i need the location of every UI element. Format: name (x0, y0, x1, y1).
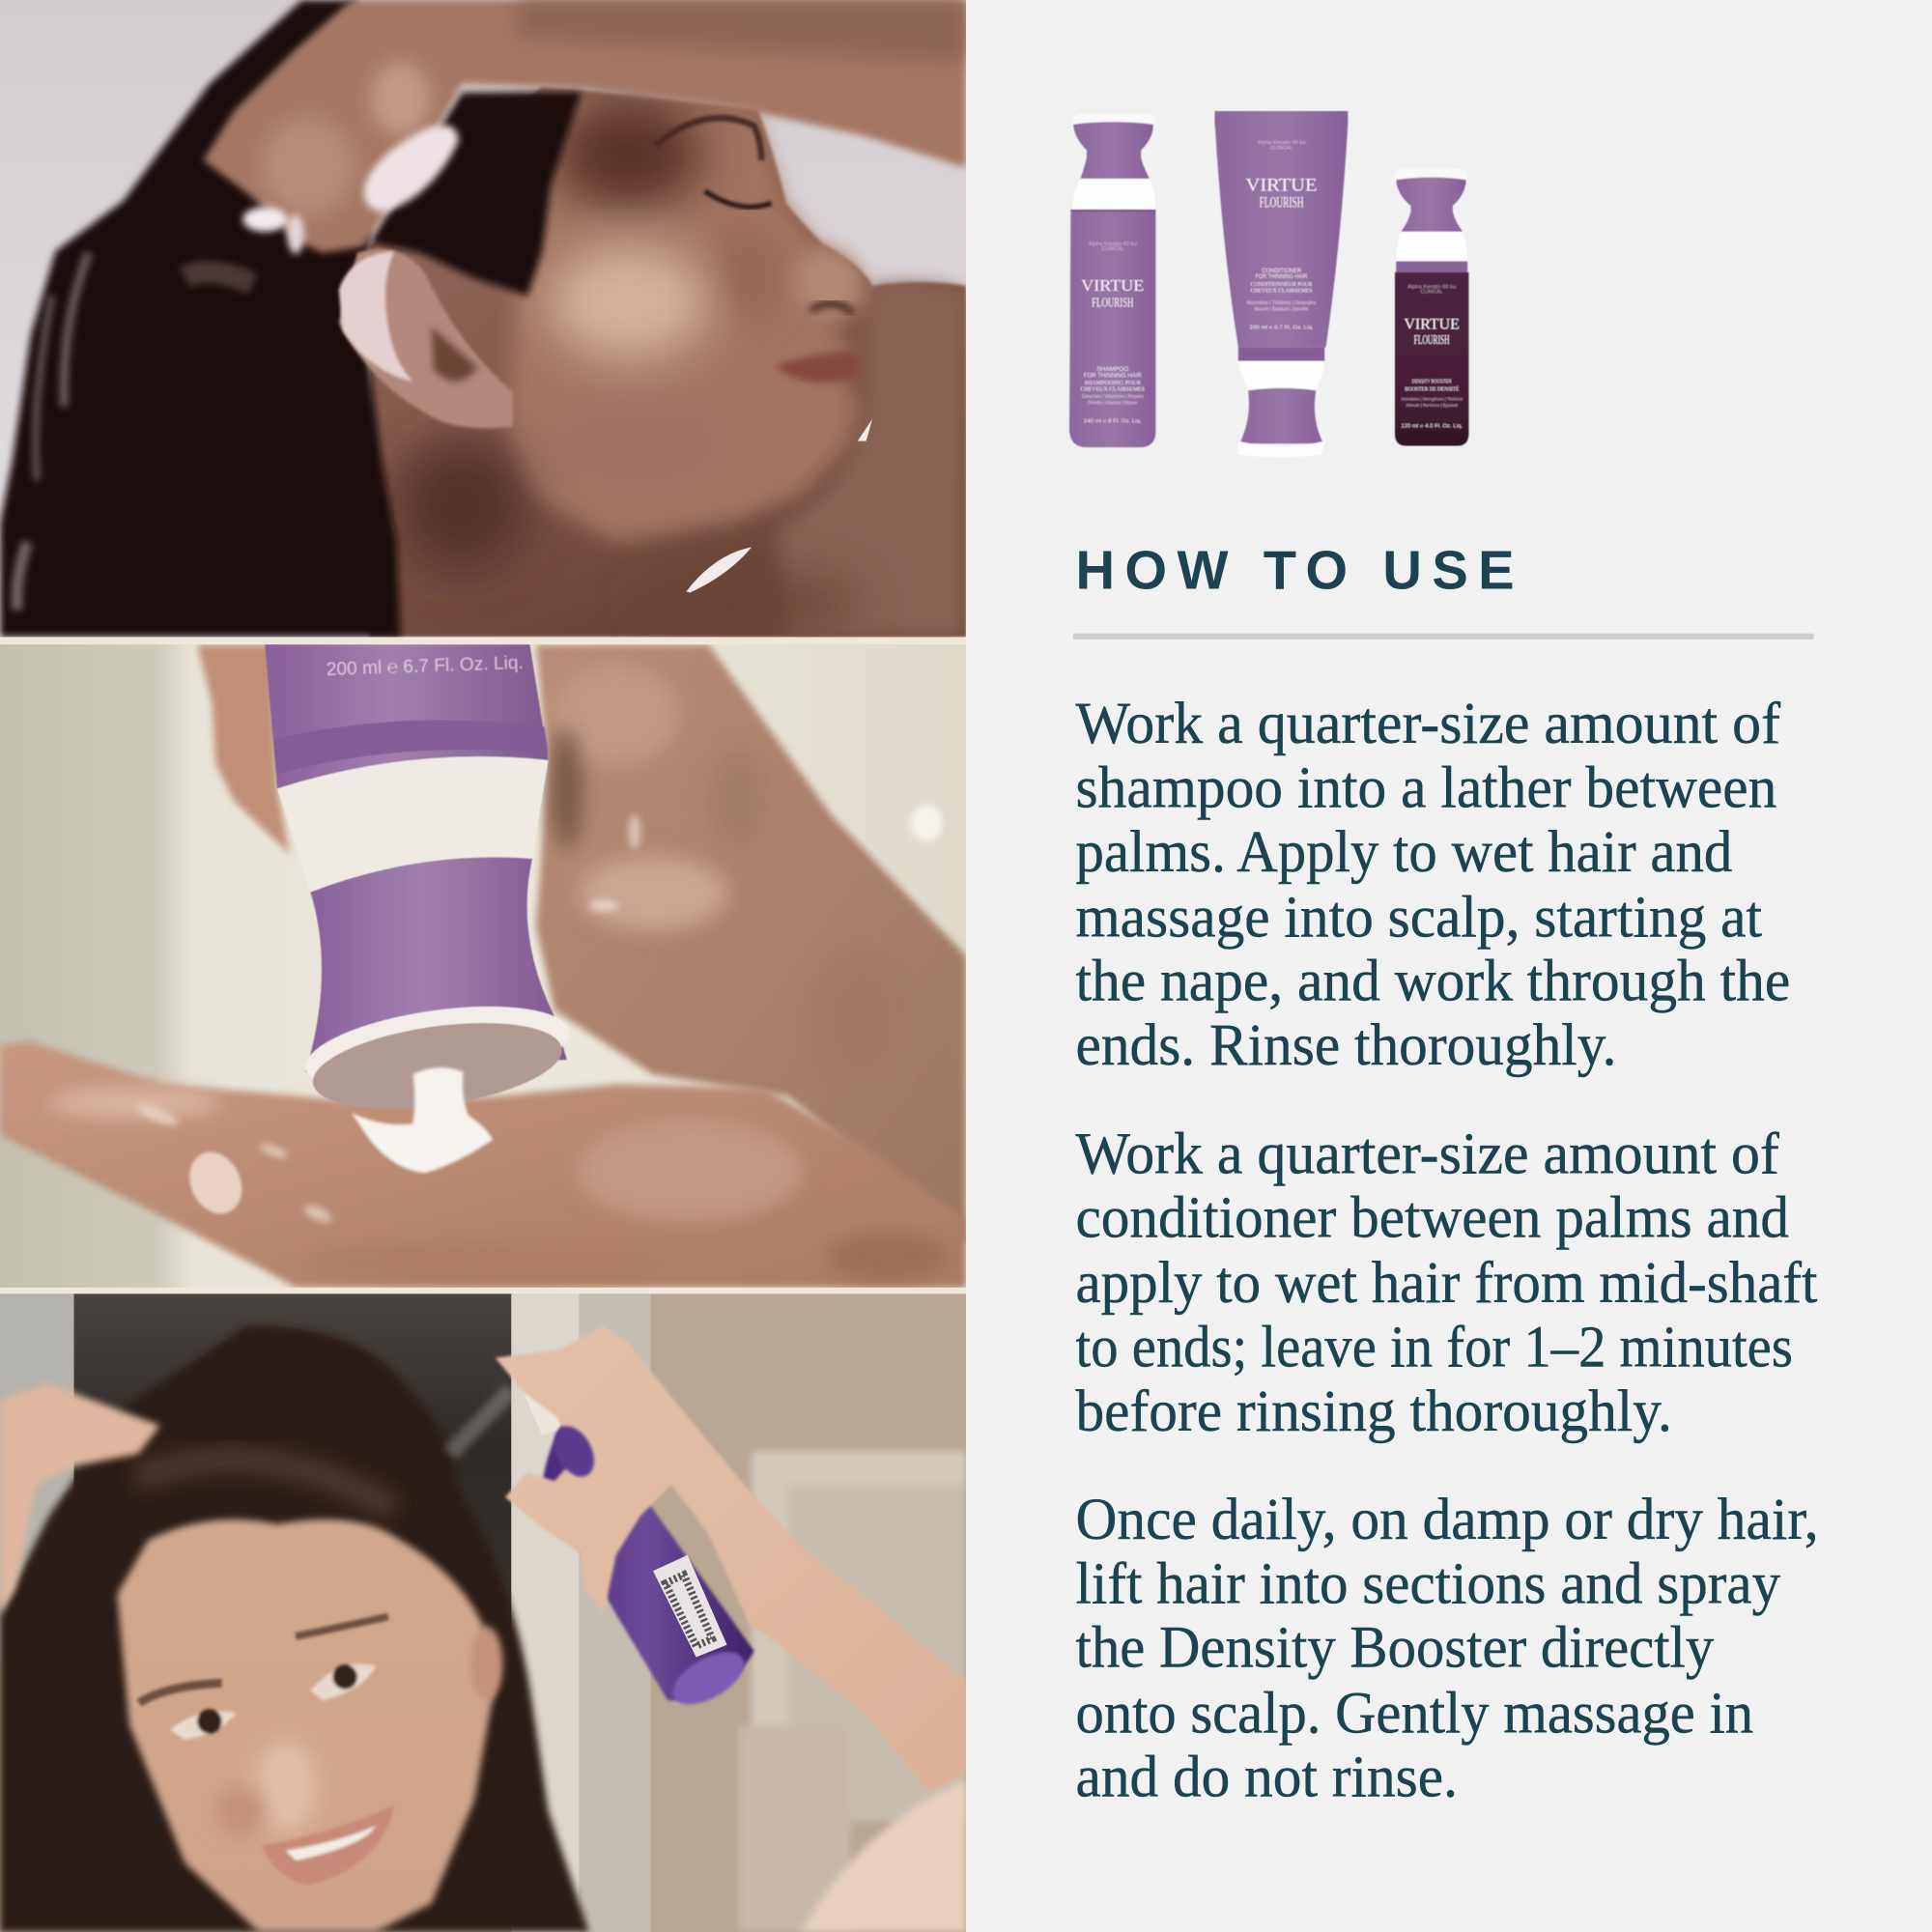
ear (339, 249, 513, 428)
booster label: CLINICAL (1421, 290, 1443, 296)
conditioner label: CHEVEUX CLAIRSEMES (1251, 287, 1313, 294)
palm shading (49, 1088, 949, 1282)
heading rule (1073, 634, 1814, 639)
booster label (1401, 284, 1463, 430)
shampoo label: Detaches | Volumizes | Repairs (1082, 394, 1144, 400)
conditioner label: Alpha Keratin 60 ku (1258, 140, 1305, 146)
eyes (170, 1664, 376, 1740)
raised arm behind head (777, 283, 966, 637)
shampoo label: CHEVEUX CLAIRSEMES (1081, 385, 1145, 392)
text block: conditioner instructions (1076, 1121, 1817, 1444)
foam on hand (242, 126, 458, 254)
booster label: 120 ml ℮ 4.0 Fl. Oz. Liq. (1401, 424, 1463, 430)
text block: conditioner instructions: before rinsing thoroughly. (1076, 1378, 1672, 1444)
conditioner label: VIRTUE (1246, 176, 1318, 196)
shampoo label: Démêle | Volumise | Répare (1088, 400, 1137, 406)
product: conditioner tube (1215, 111, 1348, 457)
text block: shampoo instructions: massage into scalp, starting at (1076, 884, 1762, 950)
shampoo label: VIRTUE (1081, 276, 1144, 295)
lips (777, 352, 859, 383)
photo: woman spraying density booster (0, 1293, 966, 1932)
hair highlight (135, 1460, 394, 1509)
product: shampoo bottle (1069, 113, 1155, 447)
nostril (810, 303, 853, 313)
booster label: VIRTUE (1404, 317, 1460, 333)
booster label: Stimulates | Strengthens | Thickens (1401, 397, 1463, 403)
spray mist (450, 1390, 511, 1454)
text block: shampoo instructions: ends. Rinse thoroughly. (1076, 1012, 1616, 1078)
shampoo label: Alpha Keratin 60 ku (1089, 242, 1137, 247)
text block: density booster instructions: Once daily, on damp or dry hair, (1076, 1487, 1819, 1552)
spray bottle (511, 1358, 754, 1715)
lower hand (0, 1041, 966, 1288)
hand and forearm (203, 0, 966, 252)
conditioner label: Nourrit | Épaissit | Démêle (1254, 305, 1309, 312)
conditioner label: FLOURISH (1260, 194, 1303, 211)
eyebrows (139, 1616, 388, 1703)
nose highlight (254, 1740, 318, 1833)
lips and smile (261, 1805, 394, 1886)
left hand (0, 1383, 160, 1614)
conditioner label: CONDITIONER (1262, 268, 1301, 274)
booster label: DENSITY BOOSTER (1412, 380, 1452, 385)
fingers holding bottle (197, 644, 290, 854)
text block: conditioner instructions: Work a quarter-size amount of (1076, 1121, 1779, 1186)
upper hand highlights (539, 665, 763, 937)
conditioner label: Nourishes | Thickens | Detangles (1247, 300, 1317, 306)
cream on thumb (180, 1144, 251, 1222)
hair (0, 1325, 589, 1932)
product: density booster (1395, 169, 1468, 446)
upper hand and wrist (536, 644, 966, 1244)
ear (470, 1627, 502, 1700)
bottle volume label: 200 ml ℮ 6.7 Fl. Oz. Liq. (326, 653, 524, 680)
text block: density booster instructions: and do not rinse. (1076, 1745, 1458, 1810)
foam (352, 1067, 493, 1173)
text block: conditioner instructions: to ends; leave in for 1–2 minutes (1076, 1315, 1793, 1380)
right hand and arm (496, 1325, 966, 1793)
hair strands showing background (16, 252, 252, 610)
forearm shading (261, 0, 966, 215)
wet highlights (135, 814, 640, 1226)
eyebrow (656, 118, 761, 160)
heading: how to use: HOW TO USE (1076, 540, 1515, 601)
conditioner label: CLINICAL (1270, 145, 1293, 151)
shampoo label: 240 ml ℮ 8 Fl. Oz. Liq. (1084, 418, 1142, 424)
text block: density booster instructions (1076, 1487, 1819, 1810)
conditioner label: FOR THINNING HAIR (1256, 273, 1308, 280)
skin: face, neck and shoulder (370, 86, 966, 637)
text block: shampoo instructions: the nape, and work through the (1076, 949, 1790, 1014)
shampoo label: SHAMPOO (1096, 366, 1128, 373)
shampoo label: SHAMPOOING POUR (1084, 380, 1142, 386)
face (117, 1520, 497, 1932)
shoulder (801, 1780, 966, 1932)
back hair (0, 0, 401, 637)
conditioner label: CONDITIONNEUR POUR (1251, 281, 1313, 288)
shampoo label: CLINICAL (1101, 246, 1123, 252)
shampoo label: FOR THINNING HAIR (1084, 372, 1142, 379)
booster label: Alpha Keratin 60 ku (1407, 284, 1456, 290)
booster label: Stimule | Renforce | Épaissit (1406, 402, 1458, 409)
text block: shampoo instructions: Work a quarter-size amount of (1076, 691, 1781, 756)
conditioner label: 200 ml ℮ 6.7 Fl. Oz. Liq. (1249, 326, 1314, 331)
face shading (394, 99, 863, 634)
products group (1069, 111, 1468, 457)
text block: conditioner instructions: apply to wet hair from mid-shaft (1076, 1250, 1817, 1316)
conditioner label (1246, 140, 1318, 331)
booster label: BOOSTER DE DENSITÉ (1405, 384, 1460, 392)
background door (739, 1452, 966, 1932)
face (505, 99, 867, 542)
nose highlight (796, 249, 860, 313)
bottle neck between fingers (546, 1419, 602, 1484)
text block: density booster instructions: onto scalp. Gently massage in (1076, 1680, 1753, 1746)
photo: shampoo squeezed onto palm (0, 644, 966, 1288)
shampoo label (1081, 242, 1145, 425)
text block: shampoo instructions: shampoo into a lather between (1076, 754, 1776, 820)
text block: density booster instructions: lift hair into sections and spray (1076, 1550, 1780, 1616)
shampoo label: FLOURISH (1092, 296, 1133, 311)
text block: density booster instructions: the Density Booster directly (1076, 1615, 1715, 1681)
eyelash (705, 191, 771, 207)
text block: shampoo instructions: palms. Apply to wet hair and (1076, 819, 1732, 885)
skin gloss highlights (686, 419, 872, 593)
photo: woman lathering shampoo into her hair (0, 0, 966, 637)
shampoo bottle (265, 644, 575, 1122)
photo gaps (0, 0, 966, 1932)
booster label: FLOURISH (1414, 332, 1450, 347)
front hair (370, 91, 582, 296)
text block: conditioner instructions: conditioner between palms and (1076, 1185, 1789, 1251)
text block: shampoo instructions (1076, 691, 1790, 1078)
